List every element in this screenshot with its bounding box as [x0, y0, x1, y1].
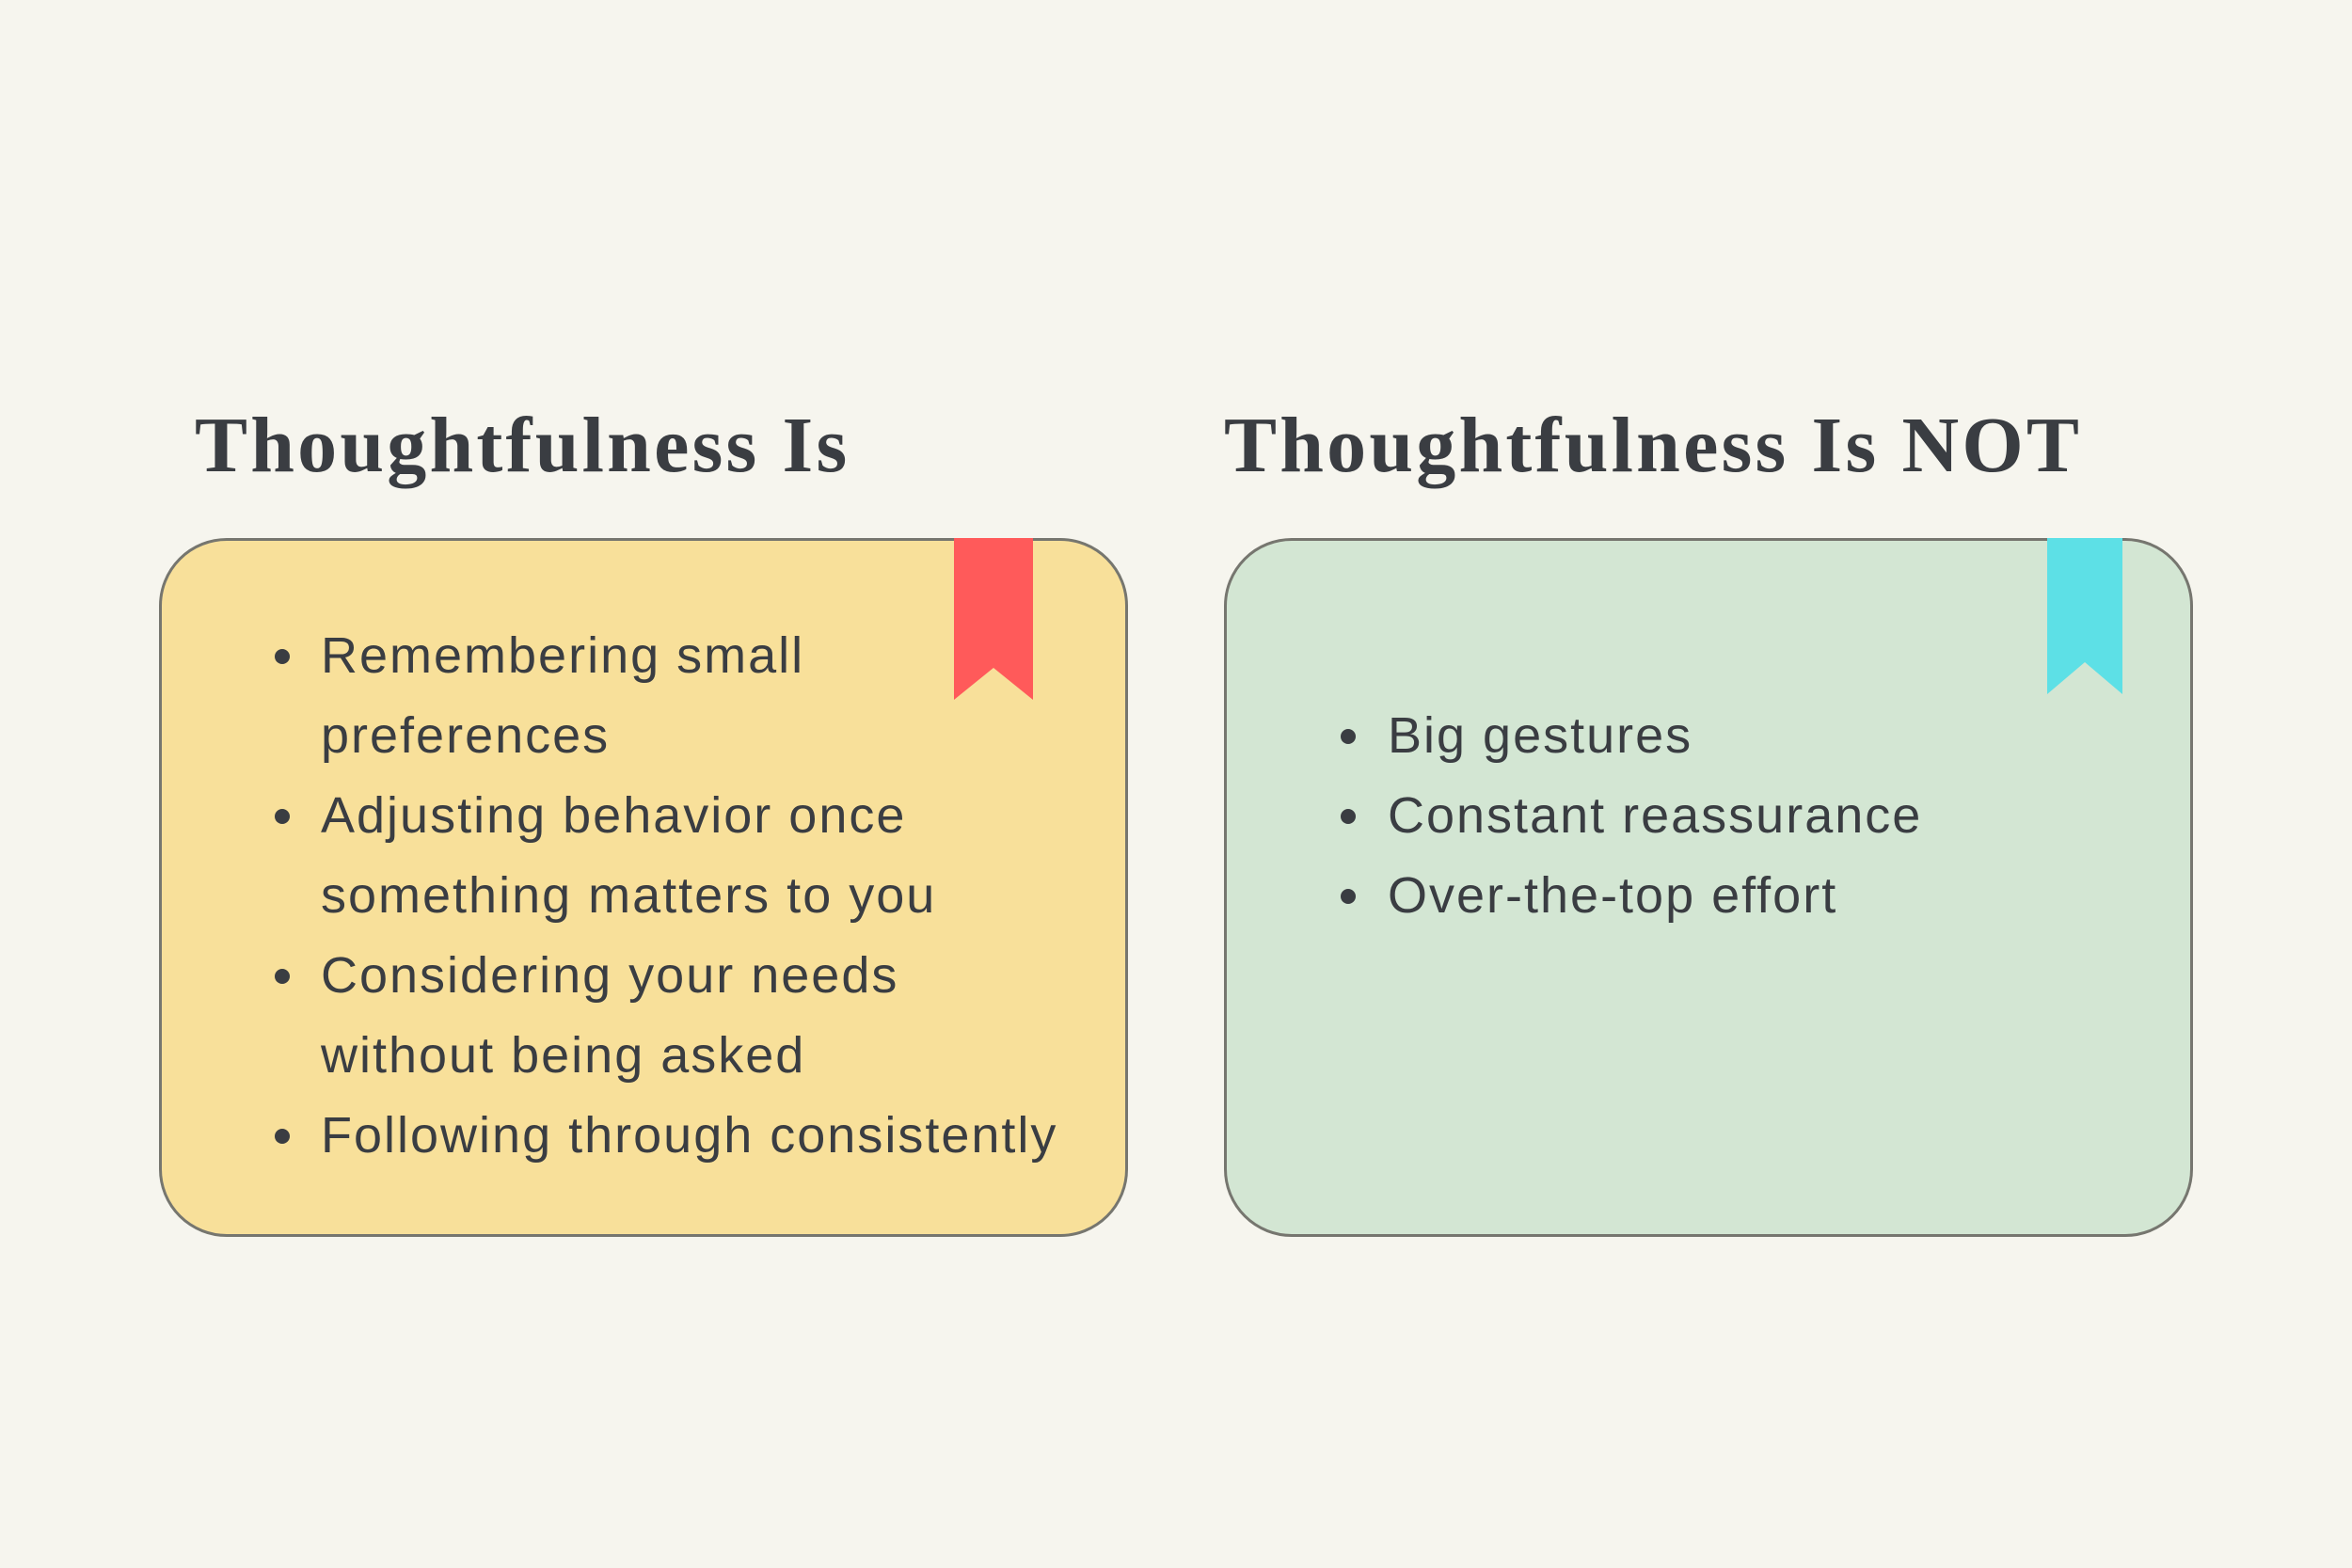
ribbon: cyan bookmark [2047, 538, 2122, 694]
title: Thoughtfulness Is: Thoughtfulness Is [195, 402, 850, 489]
ribbon: red bookmark [954, 538, 1033, 700]
list: is not items: Big gestures [1388, 707, 1692, 764]
list: is items: Remembering small [321, 627, 804, 684]
list: is items: Following through consistently [321, 1107, 1057, 1164]
list: is items [275, 627, 1057, 1164]
list: is not items: Over-the-top effort [1388, 867, 1837, 924]
list: is items: Adjusting behavior once [321, 787, 906, 844]
title: Thoughtfulness Is NOT: Thoughtfulness Is NOT [1224, 402, 2082, 489]
panel: thoughtfulness is not [1224, 538, 2193, 1237]
panel: thoughtfulness is [159, 538, 1128, 1237]
list: is items: something matters to you [321, 867, 936, 924]
list: is items: preferences [321, 707, 610, 764]
list: is items: without being asked [321, 1027, 805, 1084]
list: is not items [1341, 707, 1922, 924]
list: is not items: Constant reassurance [1388, 787, 1922, 844]
list: is items: Considering your needs [321, 947, 898, 1004]
